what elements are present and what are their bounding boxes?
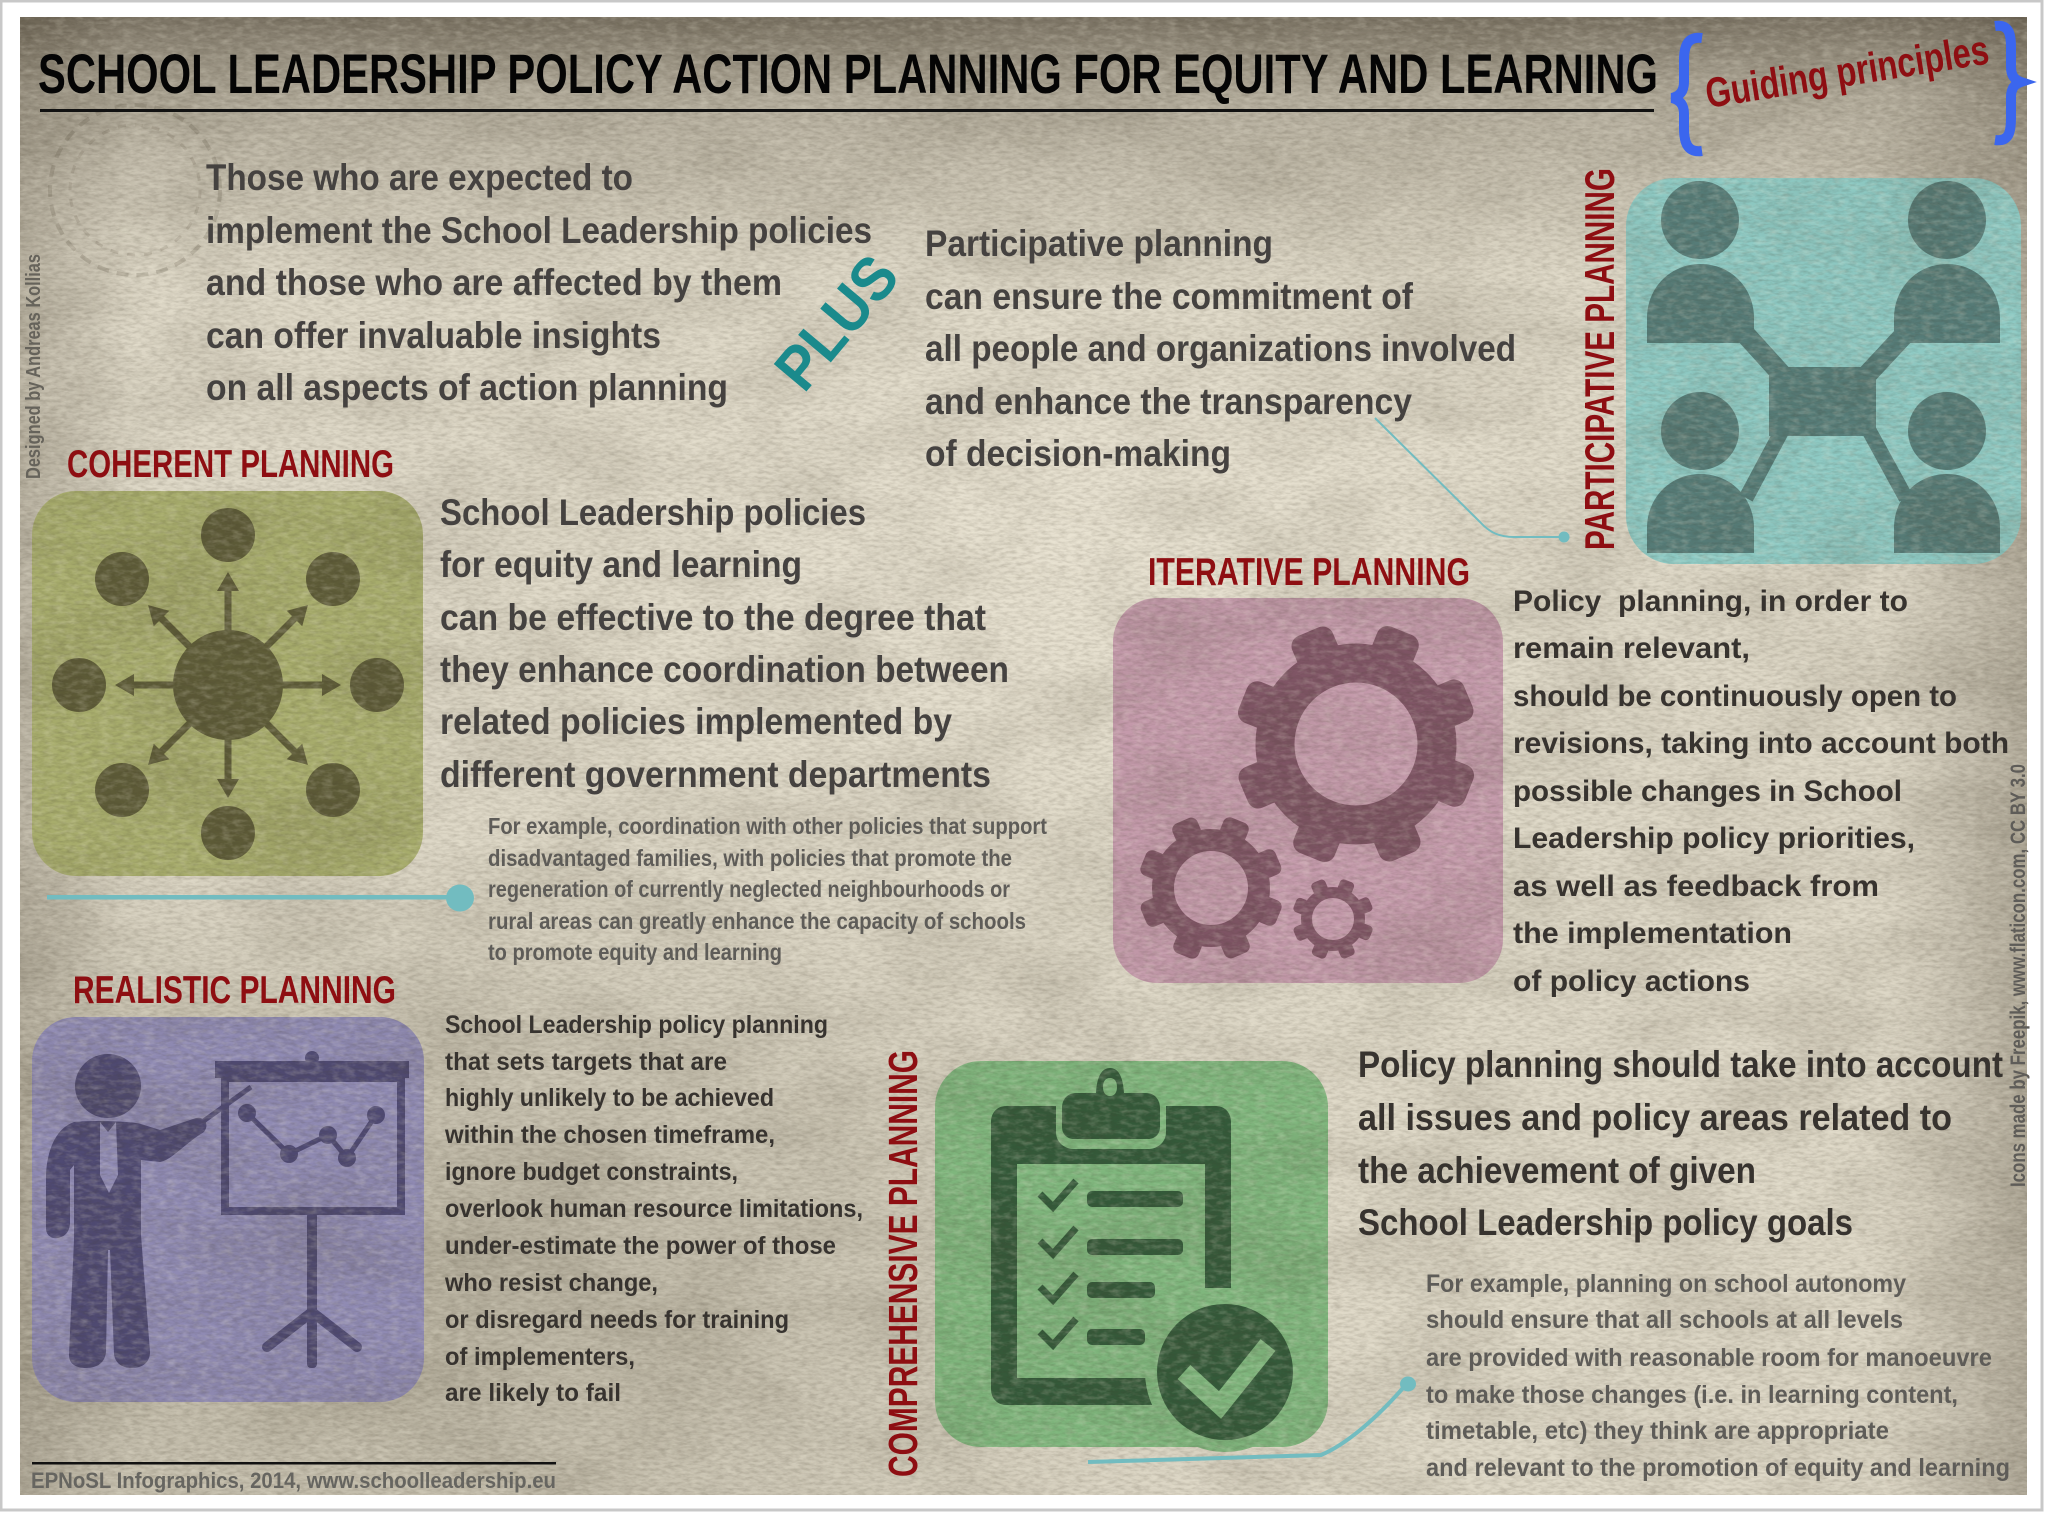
connector: coherent icon to example: [47, 884, 474, 912]
comprehensive panel background: [935, 1061, 1328, 1447]
text: coherent planning: related policies implemented by: [440, 701, 952, 742]
panel: realistic icon: [32, 1017, 424, 1402]
text: intro stakeholders: can offer invaluable insights: [206, 315, 661, 356]
text: iterative planning: revisions, taking into account both: [1513, 727, 2009, 760]
text: comprehensive planning: all issues and policy areas related to: [1358, 1097, 1952, 1138]
credit: designer: Designed by Andreas Kollias: [23, 254, 45, 479]
heading: participative planning: PARTICIPATIVE PLANNING: [1576, 168, 1623, 550]
guiding principles bracket: [1672, 26, 2021, 151]
plus label: PLUS: [762, 243, 912, 403]
text: coherent planning: can be effective to the degree that: [440, 597, 986, 638]
connector: comprehensive icon to example: [1088, 1376, 1416, 1462]
icon: hub with arrows to eight circles: [52, 508, 404, 860]
text: comprehensive example: and relevant to the promotion of equity and learning: [1426, 1454, 2010, 1482]
text: realistic planning: ignore budget constraints,: [445, 1158, 738, 1186]
text: intro stakeholders: [206, 157, 872, 408]
text: iterative planning: should be continuously open to: [1513, 680, 1957, 713]
text: comprehensive example: For example, planning on school autonomy: [1426, 1270, 1906, 1298]
text: realistic planning: who resist change,: [444, 1269, 658, 1297]
heading: iterative planning: ITERATIVE PLANNING: [1148, 551, 1470, 594]
panel: comprehensive icon: [935, 1061, 1328, 1452]
text: iterative planning: Policy planning, in order to: [1513, 585, 1908, 618]
text: coherent planning: [440, 492, 1009, 795]
text: comprehensive example: to make those changes (i.e. in learning content,: [1426, 1381, 1958, 1409]
text: coherent example: For example, coordination with other policies that support: [488, 813, 1047, 839]
credit: icons: Icons made by Freepik, www.flaticon.com, CC BY 3.0: [2007, 764, 2030, 1187]
text: iterative planning: remain relevant,: [1513, 632, 1750, 665]
icon: network of four people: [1647, 181, 2000, 553]
coherent panel background: [32, 491, 423, 876]
text: intro stakeholders: and those who are affected by them: [206, 262, 782, 303]
text: participative planning: Participative planning: [925, 223, 1273, 264]
text: comprehensive planning: [1358, 1044, 2003, 1243]
iterative panel background: [1113, 598, 1503, 983]
panel: iterative icon: [1113, 598, 1503, 983]
panel: participative icon: [1626, 178, 2021, 564]
text: iterative planning: [1513, 585, 2009, 998]
text: intro stakeholders: implement the School Leadership policies: [206, 210, 872, 251]
realistic panel background: [32, 1017, 424, 1402]
connector: participative text to heading: [1375, 418, 1570, 542]
right brace: [1995, 26, 2021, 140]
text: iterative planning: as well as feedback from: [1513, 870, 1879, 903]
heading: coherent planning: COHERENT PLANNING: [67, 443, 394, 486]
left brace: [1672, 38, 1702, 151]
text: comprehensive example: [1426, 1270, 2010, 1482]
text: iterative planning: of policy actions: [1513, 965, 1750, 998]
text: participative planning: and enhance the transparency: [925, 381, 1412, 422]
title rule: [40, 109, 1654, 112]
text: realistic planning: are likely to fail: [445, 1379, 621, 1407]
text: coherent example: rural areas can greatly enhance the capacity of schools: [488, 908, 1026, 934]
text: intro stakeholders: Those who are expected to: [206, 157, 633, 198]
panel: coherent icon: [32, 491, 423, 876]
text: coherent example: to promote equity and learning: [488, 939, 782, 965]
text: iterative planning: the implementation: [1513, 917, 1792, 950]
text: comprehensive example: timetable, etc) they think are appropriate: [1426, 1417, 1889, 1445]
icon: man presenting a chart: [46, 1051, 409, 1368]
text: comprehensive planning: the achievement of given: [1358, 1150, 1756, 1191]
text: iterative planning: possible changes in School: [1513, 775, 1902, 808]
text: realistic planning: [444, 1011, 863, 1407]
text: coherent example: [488, 813, 1047, 965]
text: coherent example: regeneration of currently neglected neighbourhoods or: [488, 876, 1010, 902]
text: participative planning: can ensure the commitment of: [925, 276, 1414, 317]
icon: three gears: [1138, 623, 1477, 961]
text: coherent planning: different government departments: [440, 754, 991, 795]
text: realistic planning: School Leadership policy planning: [445, 1011, 828, 1039]
text: realistic planning: under-estimate the power of those: [445, 1232, 836, 1260]
text: coherent example: disadvantaged families, with policies that promote the: [488, 845, 1012, 871]
text: realistic planning: within the chosen timeframe,: [444, 1121, 775, 1149]
text: intro stakeholders: on all aspects of action planning: [206, 367, 728, 408]
text: comprehensive planning: School Leadership policy goals: [1358, 1202, 1853, 1243]
participative panel background: [1626, 178, 2021, 564]
text: coherent planning: School Leadership policies: [440, 492, 866, 533]
text: coherent planning: they enhance coordination between: [440, 649, 1009, 690]
text: realistic planning: that sets targets that are: [445, 1048, 727, 1076]
text: coherent planning: for equity and learning: [440, 544, 802, 585]
text: participative planning: of decision-making: [925, 433, 1231, 474]
text: comprehensive example: are provided with reasonable room for manoeuvre: [1426, 1344, 1992, 1372]
text: realistic planning: highly unlikely to be achieved: [445, 1084, 774, 1112]
text: realistic planning: or disregard needs for training: [445, 1306, 789, 1334]
icon: clipboard checklist: [991, 1068, 1305, 1452]
text: realistic planning: overlook human resource limitations,: [445, 1195, 863, 1223]
text: participative planning: [925, 223, 1516, 474]
text: iterative planning: Leadership policy priorities,: [1513, 822, 1915, 855]
footer source: EPNoSL Infographics, 2014, www.schoolleadership.eu: [31, 1468, 556, 1493]
heading: comprehensive planning: COMPREHENSIVE PLANNING: [880, 1050, 926, 1477]
text: comprehensive example: should ensure that all schools at all levels: [1426, 1306, 1903, 1334]
text: participative planning: all people and organizations involved: [925, 328, 1516, 369]
heading: realistic planning: REALISTIC PLANNING: [73, 969, 396, 1012]
text: realistic planning: of implementers,: [445, 1343, 635, 1371]
